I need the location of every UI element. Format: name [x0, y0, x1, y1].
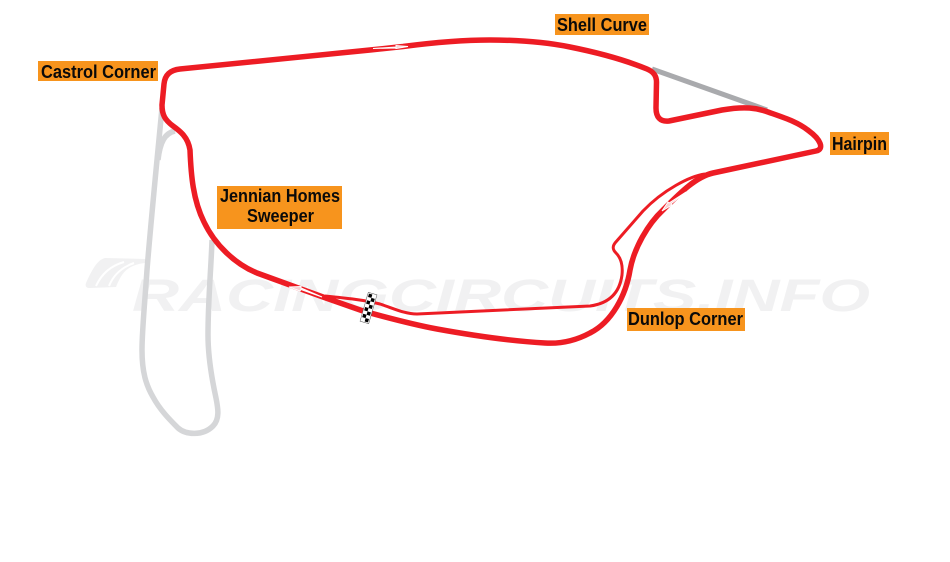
direction arrow: top straight	[373, 46, 408, 48]
label: Jennian Homes Sweeper	[217, 185, 342, 229]
label: Jennian Homes Sweeper: Jennian Homes	[220, 185, 340, 206]
grey cut-off section	[652, 69, 767, 110]
label: Castrol Corner: Castrol Corner	[41, 61, 156, 82]
red thin inner circuit	[325, 174, 705, 314]
label: Shell Curve: Shell Curve	[557, 14, 647, 35]
watermark: racingcircuits.info	[86, 258, 870, 321]
icon: chequered start line	[360, 292, 377, 324]
label: Jennian Homes Sweeper: Sweeper	[247, 205, 314, 226]
watermark: racingcircuits.info: RACINGCIRCUITS.INFO	[132, 270, 870, 321]
direction arrow: lower left	[289, 286, 322, 297]
label: Dunlop Corner: Dunlop Corner	[628, 308, 743, 329]
direction arrow: right side	[662, 192, 686, 211]
grey unused loop section	[142, 108, 218, 433]
label: Hairpin: Hairpin	[832, 133, 887, 154]
red main circuit	[162, 40, 821, 343]
